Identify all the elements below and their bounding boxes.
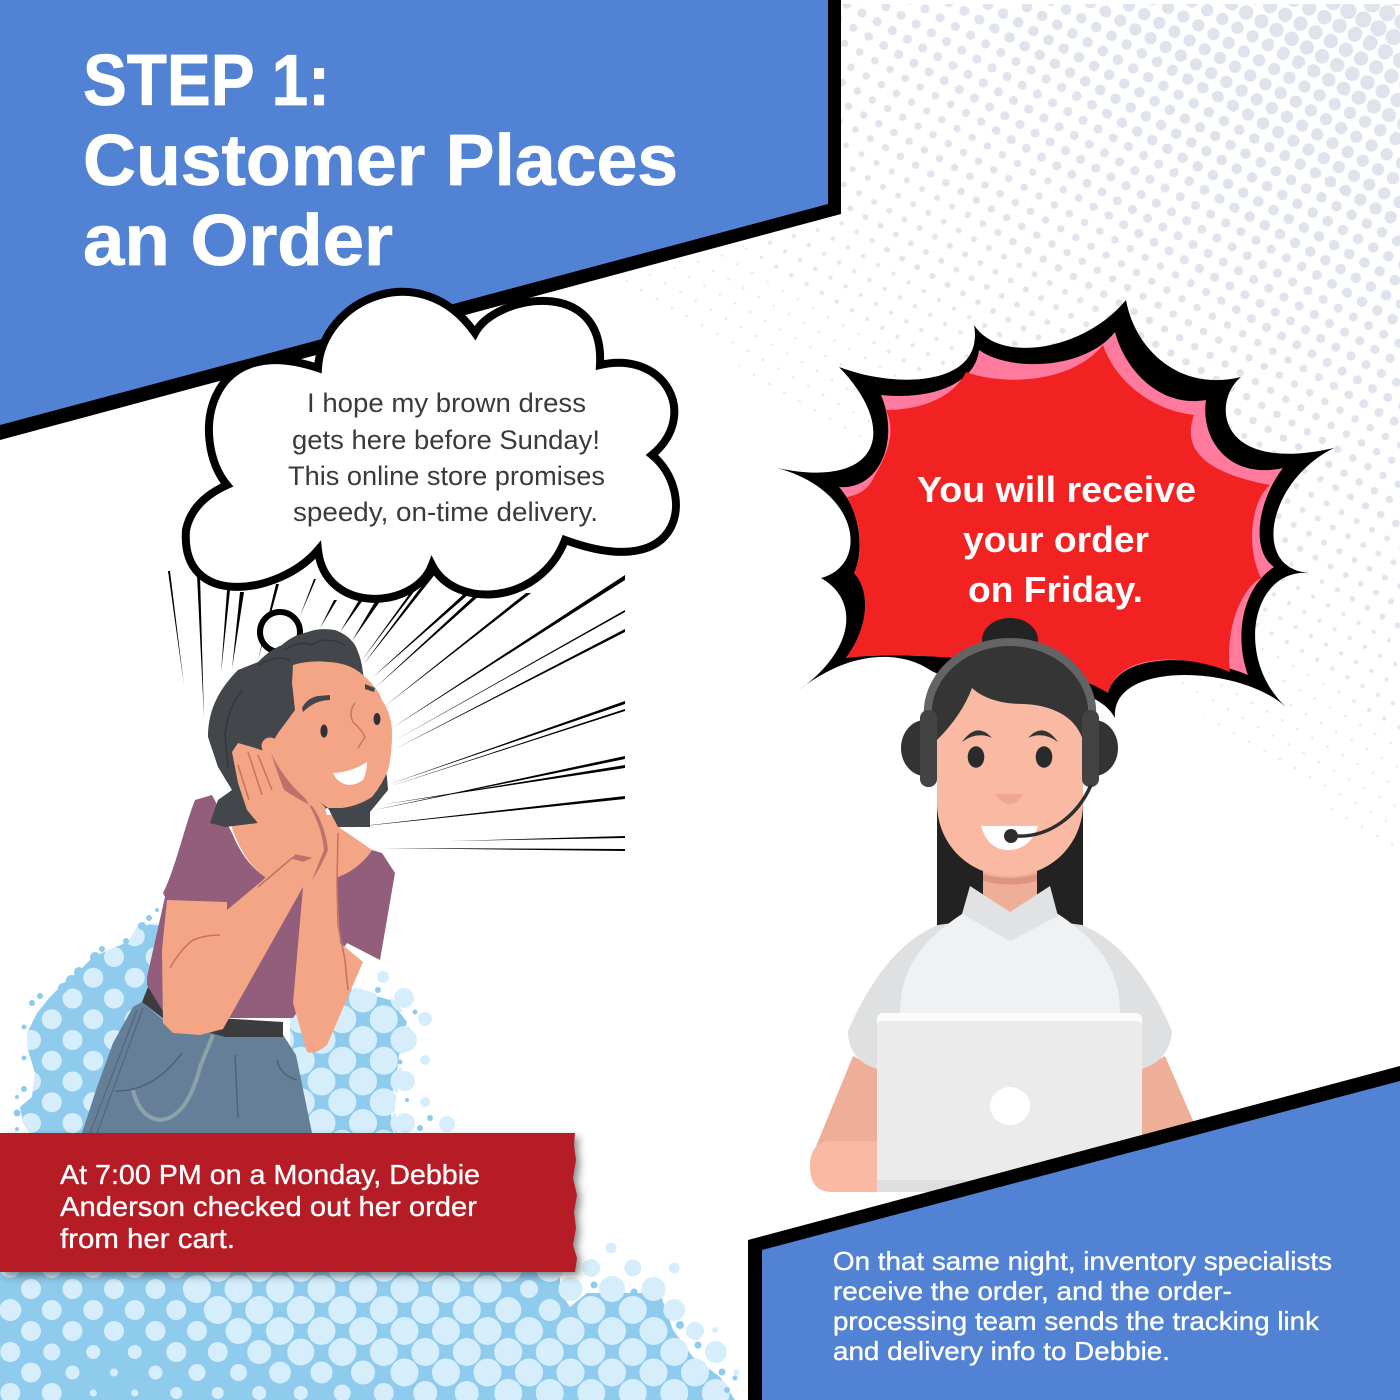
text block: inventory specialists: On that same night, inventory specialists	[833, 1246, 1332, 1276]
banner text: from her cart.	[60, 1223, 235, 1254]
torso	[900, 914, 1120, 1014]
right arm	[293, 819, 363, 1053]
title	[83, 41, 678, 281]
smile	[333, 762, 367, 785]
thought bubble small circle	[260, 612, 300, 652]
black burst outline	[777, 300, 1334, 718]
halftone: blue dots bottom left	[0, 1242, 740, 1400]
callout: red burst speech shape	[777, 300, 1334, 718]
face	[937, 688, 1083, 876]
text block: inventory specialists: receive the order, and the order-	[833, 1276, 1232, 1306]
panel: bottom right blue block	[748, 1066, 1400, 1400]
banner text: Anderson checked out her order	[60, 1191, 477, 1222]
title: Customer Places	[83, 121, 678, 201]
burst text: You will receive	[917, 469, 1196, 510]
mouth	[981, 826, 1038, 850]
cloud outline	[186, 292, 676, 599]
woman illustration	[82, 629, 395, 1133]
cloud text: speedy, on-time delivery.	[293, 497, 598, 527]
laptop	[877, 1013, 1142, 1192]
halftone: blue dots behind woman	[14, 908, 455, 1133]
ear	[262, 738, 278, 754]
cloud text: gets here before Sunday!	[292, 425, 600, 455]
text block: inventory specialists: and delivery info to Debbie.	[833, 1336, 1170, 1366]
panel: top blue title block	[0, 0, 841, 440]
cloud text: This online store promises	[288, 461, 605, 491]
collar	[962, 886, 1058, 941]
jeans	[82, 1002, 312, 1133]
headband	[928, 642, 1092, 716]
sleeves	[848, 915, 1172, 1069]
belt	[142, 987, 283, 1037]
face	[262, 661, 392, 808]
neck shadow	[983, 874, 1037, 884]
thought cloud	[186, 292, 676, 599]
hair bun	[982, 618, 1038, 662]
long hair	[937, 740, 1083, 926]
speed lines radiating from the woman	[168, 568, 625, 851]
arms	[810, 1056, 877, 1161]
burst text	[917, 469, 1196, 610]
neck	[983, 860, 1037, 916]
ear cups	[901, 720, 949, 776]
banner text	[60, 1159, 480, 1254]
microphone	[1015, 785, 1091, 836]
burst text: on Friday.	[968, 569, 1143, 610]
banner text: At 7:00 PM on a Monday, Debbie	[60, 1159, 480, 1190]
back hair	[208, 629, 388, 827]
head hair	[927, 640, 1093, 740]
hand	[810, 1141, 877, 1192]
skin shadow lines	[271, 753, 328, 880]
eyes and brows	[320, 713, 380, 738]
text block: inventory specialists	[833, 1246, 1332, 1366]
pink highlight	[839, 332, 1283, 693]
eyes	[968, 746, 1052, 768]
title: STEP 1:	[83, 41, 330, 121]
red fill	[846, 345, 1270, 693]
title: an Order	[83, 201, 393, 281]
burst text: your order	[963, 519, 1149, 560]
nose	[351, 703, 365, 748]
red torn banner	[0, 1133, 577, 1272]
left arm and hand	[162, 743, 338, 1035]
shirt	[147, 795, 395, 1018]
nose	[996, 794, 1023, 804]
text block: inventory specialists: processing team sends the tracking link	[833, 1306, 1320, 1336]
cloud text	[288, 388, 605, 527]
hair strands	[225, 640, 345, 768]
cloud text: I hope my brown dress	[307, 388, 586, 418]
headset pads	[920, 710, 937, 787]
support agent illustration	[810, 618, 1195, 1192]
upper chest skin	[232, 815, 372, 878]
halftone background: grey dots top right	[625, 4, 1400, 846]
eyebrows	[962, 730, 1058, 742]
